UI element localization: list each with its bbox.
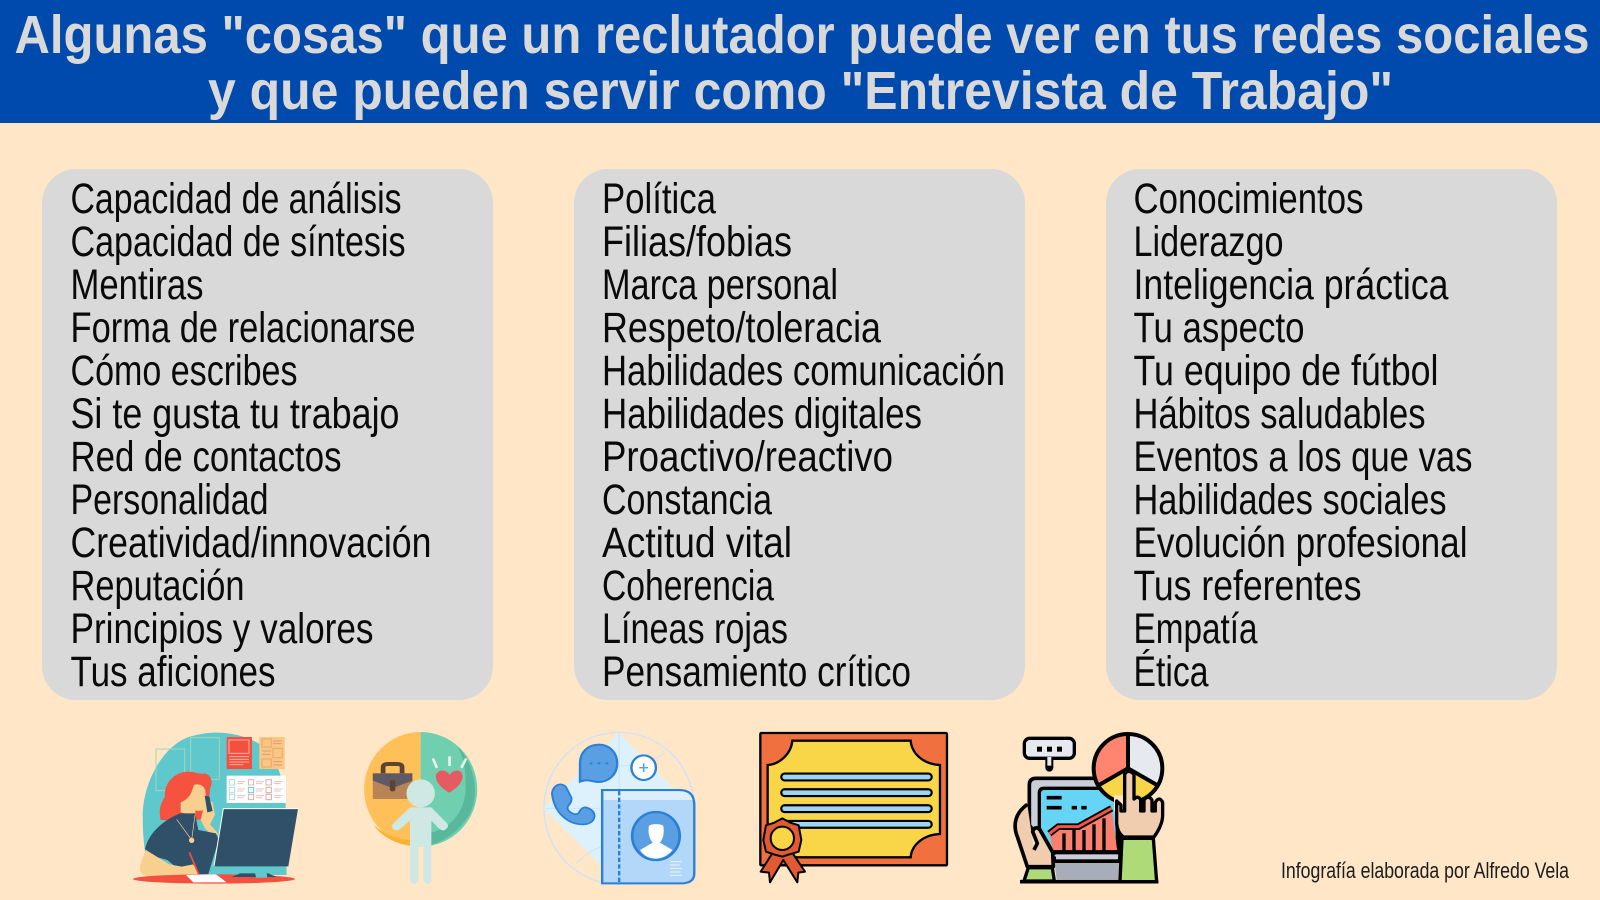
panel: left column list: Tus aficiones (70, 649, 276, 696)
panel: middle column list: Filias/fobias (602, 219, 792, 266)
panel: right column list: Eventos a los que vas (1134, 434, 1472, 481)
panel: left column list: Personalidad (70, 477, 268, 524)
panel: middle column list: Coherencia (602, 563, 774, 610)
panel: left column list: Red de contactos (70, 434, 342, 481)
panel: right column list: Hábitos saludables (1134, 391, 1426, 438)
title banner (0, 0, 1600, 123)
panel: right column list: Ética (1134, 649, 1209, 696)
panel: middle column list: Respeto/toleracia (602, 305, 881, 352)
panel: right column list: Inteligencia práctica (1134, 262, 1449, 309)
title banner: y que pueden servir como "Entrevista de Trabajo" (208, 61, 1393, 121)
panel: left column list: Si te gusta tu trabajo (70, 391, 400, 438)
panel: left column list: Capacidad de análisis (70, 176, 402, 223)
icon: contact book with globe, chat and phone (544, 732, 694, 884)
panel: right column list: Tu aspecto (1134, 305, 1304, 352)
panel: middle column list: Actitud vital (602, 520, 792, 567)
panel: middle column list: Marca personal (602, 262, 838, 309)
panel: middle column list: Habilidades comunicación (602, 348, 1005, 395)
panel: middle column list: Proactivo/reactivo (602, 434, 893, 481)
panel: left column list: Reputación (70, 563, 244, 610)
panel: left column list: Cómo escribes (70, 348, 298, 395)
panel: middle column list: Constancia (602, 477, 772, 524)
panel: middle column list: Líneas rojas (602, 606, 788, 653)
panel: right column list: Evolución profesional (1134, 520, 1468, 567)
panel: right column list: Tu equipo de fútbol (1134, 348, 1438, 395)
panel: left column list: Forma de relacionarse (70, 305, 416, 352)
panel: right column list: Liderazgo (1134, 219, 1284, 266)
panel: left column list (42, 169, 493, 700)
panel: right column list (1106, 169, 1557, 700)
panel: right column list: Empatía (1134, 606, 1258, 653)
panel: middle column list (574, 169, 1025, 700)
panel: left column list: Capacidad de síntesis (70, 219, 406, 266)
icon: recruiter woman on phone at desk (133, 733, 298, 884)
icon: hands using tablet with pie chart (1015, 734, 1167, 882)
panel: left column list: Principios y valores (70, 606, 374, 653)
panel: middle column list: Habilidades digitales (602, 391, 922, 438)
panel: right column list: Habilidades sociales (1134, 477, 1446, 524)
icon: diploma certificate with rosette (760, 733, 947, 882)
panel: left column list: Mentiras (70, 262, 204, 309)
panel: right column list: Conocimientos (1134, 176, 1364, 223)
panel: right column list: Tus referentes (1134, 563, 1362, 610)
panel: middle column list: Política (602, 176, 716, 223)
panel: middle column list: Pensamiento crítico (602, 649, 911, 696)
icon: person between work and love (364, 732, 477, 884)
panel: left column list: Creatividad/innovación (70, 520, 432, 567)
